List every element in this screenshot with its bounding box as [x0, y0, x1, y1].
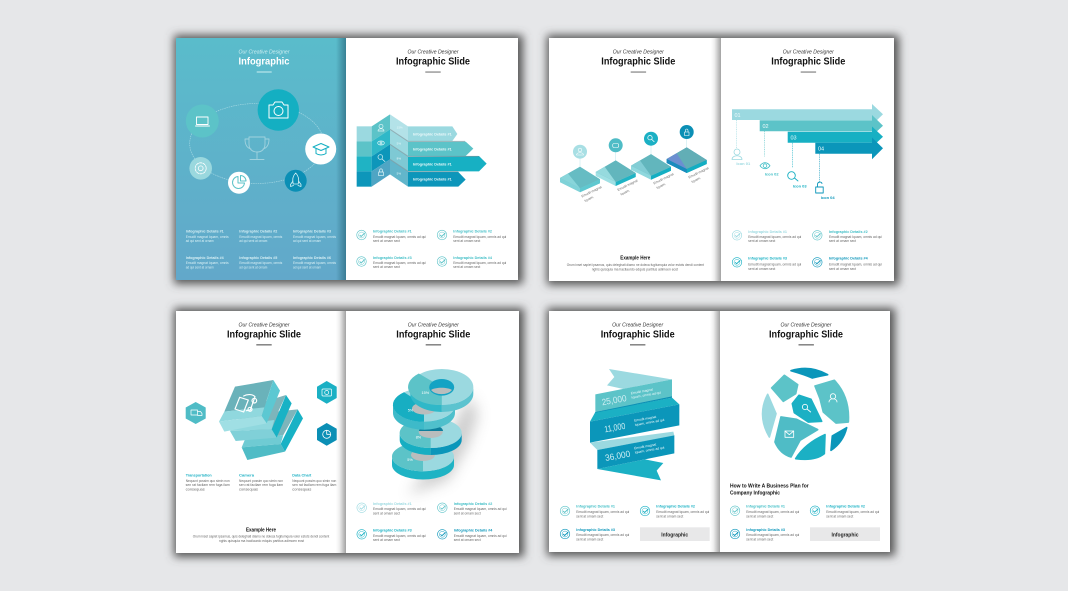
- cover details: Infographic Details #1: [186, 228, 224, 234]
- icon: user: [732, 149, 742, 160]
- icon: chart hexagon: [317, 423, 337, 446]
- icon: graduation cap circle: [305, 134, 336, 164]
- details list: Infographic Details #3: [373, 255, 412, 260]
- three column details: Camera: [239, 473, 255, 478]
- ribbon chart: [590, 369, 679, 480]
- details list: [560, 504, 710, 542]
- details list: Infographic Details #3: [576, 527, 616, 532]
- details list: sent at ornam sect: [826, 514, 853, 518]
- details list: Emudit magnat Iquam, omnis ad qui: [746, 533, 800, 537]
- icon: camera circle: [258, 89, 299, 131]
- details list: sent at ornam sect: [748, 239, 775, 243]
- spread 3: [176, 311, 519, 553]
- icon: pie chart circle: [228, 172, 250, 194]
- details list: [730, 504, 880, 542]
- icon: magnifier: [788, 172, 798, 181]
- details list: Emudit magnat Iquam, omnis ad qui: [453, 261, 507, 265]
- spread 4: [549, 311, 890, 552]
- cover details: Emudit magnat Iquam, omnis: [293, 261, 336, 265]
- stacked donut chart: [392, 369, 473, 480]
- details list: Emudit magnat Iquam, omnis ad qui: [748, 262, 802, 266]
- ribbon chart: Iquam, omnis ad qui: [634, 418, 665, 427]
- example text: Example Here: [246, 528, 276, 534]
- step labels: Emudit magnat: [617, 179, 638, 192]
- details list: sent at ornam sect: [453, 265, 480, 269]
- details list: Emudit magnat Iquam, omnis ad qui: [454, 507, 507, 511]
- example text: nghis quisquia ma hacilaurdo edquis partitus adimoen eost: [219, 539, 304, 543]
- details list: Infographic Details #2: [454, 501, 493, 506]
- cover details: ad qui sent at ornam: [239, 239, 267, 243]
- heading: Our Creative Designer: [238, 322, 290, 328]
- cover details: Emudit magnat Iquam, omnis: [186, 261, 229, 265]
- business plan heading: [730, 484, 809, 496]
- step labels: Emudit magnat: [581, 185, 602, 198]
- infographic label box: Infographic: [661, 532, 688, 538]
- step 3: [631, 132, 671, 180]
- folded arrow chart: Infographic Details #1: [413, 162, 452, 166]
- business plan heading: Company Infographic: [730, 490, 780, 496]
- page shadows: [174, 35, 899, 557]
- heading: Our Creative Designer: [408, 322, 459, 328]
- cover details: ad qui sent at ornam: [293, 265, 321, 269]
- details list: Infographic Details #1: [373, 501, 412, 506]
- example text: [567, 256, 704, 271]
- details list: Emudit magnat Iquam, omnis ad qui: [373, 235, 426, 239]
- heading: [769, 322, 843, 345]
- heading: Infographic Slide: [769, 328, 843, 340]
- folded arrow chart: 5%: [397, 141, 401, 145]
- cover details: Emudit magnat Iquam, omnis: [186, 235, 229, 239]
- details list: sent at ornam sect: [829, 267, 856, 271]
- details list: Emudit magnat Iquam, omnis ad qui: [373, 261, 426, 265]
- cover details: Infographic Details #4: [186, 255, 224, 260]
- icon: camera hexagon: [317, 381, 337, 404]
- step 2: [596, 138, 636, 186]
- cover details: ad qui sent at ornam: [186, 239, 214, 243]
- ribbon chart: 36,000: [604, 449, 631, 463]
- heading: Our Creative Designer: [780, 322, 832, 328]
- infographic label box: Infographic: [832, 532, 859, 538]
- folded arrow chart: Infographic Details #1: [413, 147, 452, 151]
- middle block: [230, 395, 292, 441]
- three column details: sen rat facilam rem fuga ilam: [186, 483, 230, 487]
- step 1: [560, 145, 600, 192]
- icon: laptop circle: [186, 104, 219, 138]
- cover details: Infographic Details #2: [239, 228, 278, 234]
- heading: Infographic Slide: [396, 56, 470, 68]
- cover details: Emudit magnat Iquam, omnis: [239, 235, 283, 239]
- three column details: [186, 473, 336, 491]
- panel: stacked donuts page: [346, 311, 519, 553]
- details list: Infographic Details #2: [826, 504, 866, 509]
- details list: Infographic Details #2: [453, 228, 493, 234]
- heading: Infographic Slide: [601, 56, 675, 68]
- panel: isometric steps page: [549, 38, 721, 281]
- details list: sent at ornam sect: [454, 538, 481, 542]
- details list: [732, 229, 882, 271]
- example text: Orum inset sapiet ipsamus, quis deleghati diamo ne doleca fugitumquia volor estots dendi content: [193, 534, 329, 538]
- heading: [601, 50, 675, 73]
- cover details: ad qui sent at ornam: [293, 239, 321, 243]
- example text: nghis quisquia ma hacilaurdo edquis partitus adimoen eost: [592, 267, 678, 271]
- donut 2: 5%: [408, 408, 414, 412]
- folded arrow chart: 15%: [397, 126, 403, 130]
- stacked blocks chart: [219, 380, 303, 460]
- infographic label box: [640, 527, 710, 541]
- cover heading: Our Creative Designer: [238, 50, 290, 56]
- step labels: Iquam,: [584, 195, 595, 203]
- details list: Emudit magnat Iquam, omnis ad qui: [453, 235, 507, 239]
- details list: Emudit magnat Iquam, omnis ad qui: [454, 534, 507, 538]
- step labels: Emudit magnat: [688, 166, 709, 179]
- cover details: Infographic Details #3: [293, 228, 332, 234]
- three column details: Data Chart: [292, 473, 312, 478]
- three column details: Transportation: [186, 473, 212, 478]
- donut 1: 15%: [422, 391, 430, 395]
- heading: Our Creative Designer: [612, 322, 664, 328]
- folded arrow chart: 5%: [397, 172, 401, 176]
- heading: [396, 322, 470, 345]
- ribbon chart: 25,000: [601, 393, 627, 407]
- details list: Infographic Details #4: [829, 256, 868, 261]
- cover heading: Infographic: [238, 56, 290, 68]
- details list: sent at ornam sect: [829, 239, 856, 243]
- staircase arrow chart: 02: [762, 124, 769, 130]
- staircase arrow chart: 01: [734, 113, 741, 119]
- three column details: consequas: [292, 487, 312, 491]
- details list: sent at ornam sect: [453, 239, 480, 243]
- three column details: sen rat facilam rem fuga ilam: [239, 483, 283, 487]
- icon: truck hexagon: [186, 402, 206, 424]
- three column details: sen rat facilam rem fuga ilam: [292, 483, 336, 487]
- cover details: Emudit magnat Iquam, omnis: [239, 261, 283, 265]
- heading: Our Creative Designer: [408, 50, 459, 56]
- details list: [357, 501, 507, 542]
- spread 2: [549, 38, 894, 281]
- example text: Example Here: [620, 256, 650, 262]
- details list: [357, 228, 507, 269]
- details list: Infographic Details #4: [453, 255, 493, 260]
- details list: Emudit magnat Iquam, omnis ad qui: [746, 510, 800, 514]
- details list: sent at ornam sect: [748, 267, 775, 271]
- details list: sent at ornam sect: [746, 538, 773, 542]
- ribbon chart: Emudit magnat: [634, 415, 657, 423]
- panel: blue cover page: [176, 38, 346, 280]
- bottom block: [242, 409, 303, 460]
- three column details: consequas: [186, 487, 205, 491]
- details list: Infographic Details #1: [748, 229, 788, 234]
- details list: Infographic Details #1: [373, 228, 412, 234]
- details list: Emudit magnat Iquam, omnis ad qui: [829, 235, 882, 239]
- spread 1: [176, 38, 518, 280]
- staircase arrow chart: Icon 04: [821, 195, 835, 200]
- icon: eye: [760, 163, 770, 169]
- details list: Infographic Details #1: [576, 504, 616, 509]
- staircase arrow chart: [732, 104, 883, 200]
- icon: documents and truck: [235, 395, 257, 412]
- cover details: Infographic Details #5: [239, 255, 278, 260]
- heading: [396, 50, 470, 73]
- details list: Emudit magnat Iquam, omnis ad qui: [373, 507, 426, 511]
- details list: Infographic Details #2: [829, 229, 868, 234]
- details list: sent at ornam sect: [373, 538, 400, 542]
- details list: sent at ornam sect: [576, 514, 603, 518]
- folded arrow chart: Infographic Details #1: [413, 178, 452, 182]
- staircase arrow chart: 04: [818, 146, 824, 152]
- panel: staircase arrows page: [721, 38, 894, 281]
- icon: lock: [816, 182, 823, 193]
- folded arrow chart: 8%: [397, 157, 401, 161]
- details list: Emudit magnat Iquam, omnis ad qui: [829, 262, 882, 266]
- details list: Emudit magnat Iquam, omnis ad qui: [576, 533, 630, 537]
- details list: Infographic Details #3: [373, 528, 412, 533]
- heading: [601, 322, 675, 345]
- details list: sent at ornam sect: [373, 239, 400, 243]
- icon: gear circle: [189, 157, 212, 180]
- details list: sent at ornam sect: [656, 514, 683, 518]
- icon: rocket circle: [285, 170, 307, 192]
- orbit ring: [190, 104, 324, 184]
- donut 4: 5%: [407, 458, 413, 462]
- staircase arrow chart: Icon 03: [793, 184, 807, 189]
- details list: Infographic Details #3: [746, 527, 786, 532]
- step labels: Iquam,: [656, 182, 667, 190]
- panel: stacked blocks page: [176, 311, 346, 553]
- icon: trophy: [245, 137, 269, 160]
- ribbon chart: Emudit magnat: [630, 387, 653, 395]
- details list: Emudit magnat Iquam, omnis ad qui: [656, 510, 710, 514]
- details list: Emudit magnat Iquam, omnis ad qui: [576, 510, 630, 514]
- details list: sent at ornam sect: [576, 538, 603, 542]
- staircase arrow chart: Icon 02: [765, 171, 779, 176]
- folded arrow chart: Infographic Details #1: [413, 132, 452, 136]
- step labels: Iquam,: [691, 176, 702, 184]
- folded arrow chart: [357, 114, 487, 187]
- step 4: [667, 125, 707, 173]
- infographic label box: [810, 527, 880, 541]
- example text: Orum inset sapiet ipsamus, quis deleghati diamo ne doleca fugitumquia volor estots dendi content: [567, 263, 704, 267]
- heading: Infographic Slide: [396, 328, 470, 340]
- details list: Infographic Details #4: [454, 528, 493, 533]
- heading: Infographic Slide: [227, 328, 301, 340]
- cover heading: [238, 50, 290, 72]
- step labels: Emudit magnat: [653, 172, 674, 185]
- details list: Emudit magnat Iquam, omnis ad qui: [373, 534, 426, 538]
- heading: [771, 50, 845, 73]
- business plan heading: How to Write A Business Plan for: [730, 484, 809, 490]
- cover details: ad qui sent at ornam: [239, 265, 267, 269]
- cover details: ad qui sent at ornam: [186, 265, 214, 269]
- globe chart: [763, 368, 848, 459]
- details list: sent at ornam sect: [454, 512, 481, 516]
- top block: [219, 380, 280, 432]
- donut shadow: [408, 395, 478, 495]
- panel: globe page: [720, 311, 890, 552]
- heading: Our Creative Designer: [613, 50, 664, 56]
- details list: Infographic Details #1: [746, 504, 786, 509]
- details list: Infographic Details #2: [656, 504, 696, 509]
- example text: [193, 528, 329, 543]
- staircase arrow chart: Icon 01: [736, 161, 751, 166]
- three column details: Nequunt possim quo simin non: [292, 479, 336, 483]
- panel: folded arrows page: [346, 38, 518, 280]
- three column details: consequas: [239, 487, 258, 491]
- heading: Our Creative Designer: [783, 50, 834, 56]
- ribbon chart: 11,000: [604, 421, 626, 434]
- three column details: Nequunt possim quo simin non: [186, 479, 230, 483]
- heading: Infographic Slide: [771, 56, 845, 68]
- details list: sent at ornam sect: [746, 514, 773, 518]
- details list: Emudit magnat Iquam, omnis ad qui: [826, 510, 880, 514]
- ribbon chart: Emudit magnat: [634, 442, 657, 450]
- details list: sent at ornam sect: [373, 265, 400, 269]
- details list: sent at ornam sect: [373, 512, 400, 516]
- staircase arrow chart: 03: [790, 136, 797, 142]
- step labels: Iquam,: [620, 188, 631, 196]
- three column details: Nequunt possim quo simin non: [239, 479, 283, 483]
- ribbon chart: Iquam, omnis ad qui: [631, 390, 662, 400]
- step labels: [581, 166, 709, 203]
- cover details: Emudit magnat Iquam, omnis: [293, 235, 336, 239]
- isometric step chart: [560, 125, 709, 203]
- cover details: Infographic Details #6: [293, 255, 332, 260]
- cover details: [186, 228, 336, 269]
- donut 3: 8%: [416, 436, 422, 440]
- heading: [227, 322, 301, 345]
- details list: Emudit magnat Iquam, omnis ad qui: [748, 235, 802, 239]
- heading: Infographic Slide: [601, 328, 675, 340]
- panel: ribbon page: [549, 311, 720, 552]
- details list: Infographic Details #3: [748, 256, 788, 261]
- ribbon chart: Iquam, omnis ad qui: [634, 445, 665, 455]
